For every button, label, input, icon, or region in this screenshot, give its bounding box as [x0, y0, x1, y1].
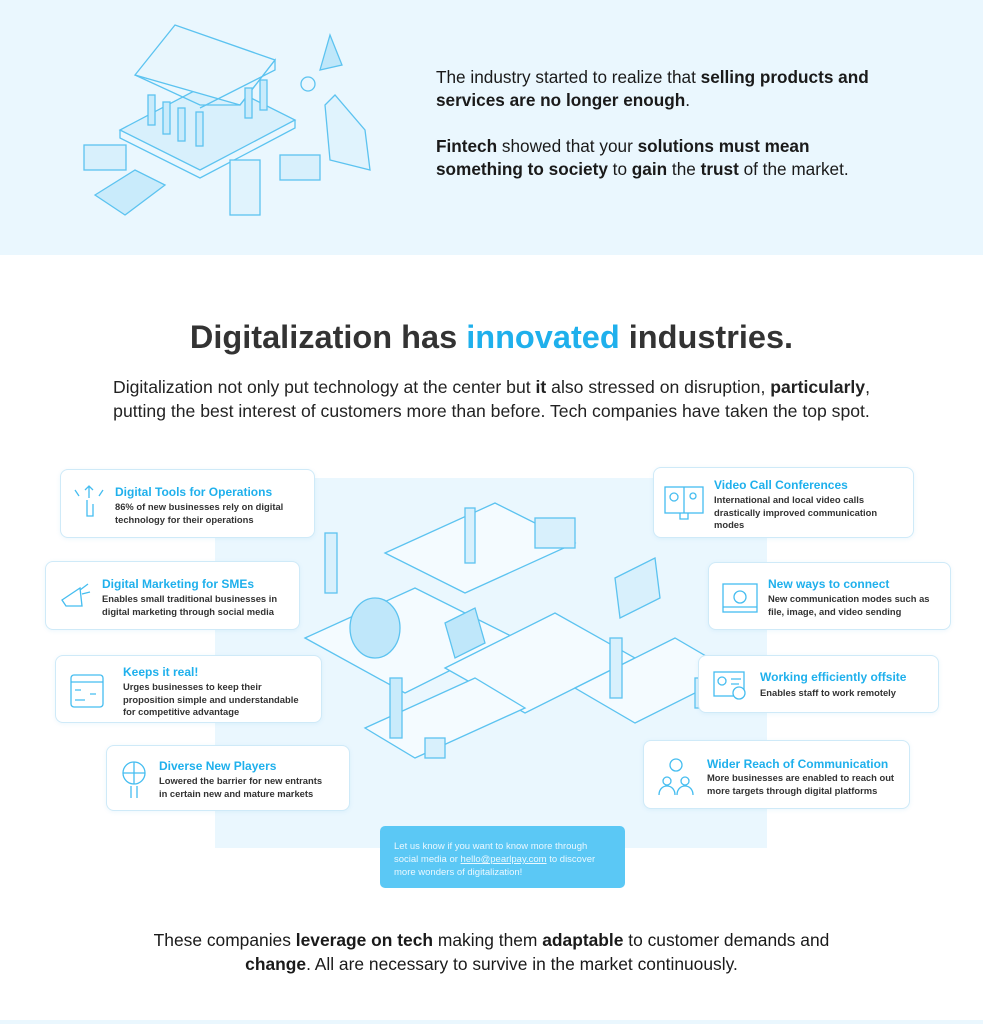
card: Video Call Conferences: drastically improved communication [714, 506, 877, 518]
card: New ways to connect: New communication modes such as [768, 593, 930, 604]
top text: services are no longer enough. [436, 90, 690, 110]
card: New ways to connect [708, 562, 951, 630]
card: Diverse New Players: Lowered the barrier for new entrants [159, 775, 322, 786]
card: Working efficiently offsite [698, 655, 939, 713]
card: Video Call Conferences [653, 467, 914, 538]
top text: The industry started to realize that selling products and [436, 67, 869, 87]
icon: megaphone [61, 584, 90, 607]
closing text: change. All are necessary to survive in the market continuously. [245, 954, 738, 974]
card: Wider Reach of Communication: Wider Reach of Communication [707, 757, 888, 771]
closing text [154, 930, 829, 974]
card: Keeps it real [55, 655, 322, 723]
intro paragraph: putting the best interest of customers more than before. Tech companies have taken the top spot. [113, 401, 870, 421]
intro paragraph: Digitalization not only put technology at the center but it also stressed on disruption, particularly, [113, 377, 870, 397]
icon: people communicating [658, 758, 694, 795]
card: Working efficiently offsite: Enables staff to work remotely [760, 687, 896, 698]
top banner [0, 0, 983, 255]
card: Keeps it real: for competitive advantage [123, 706, 239, 717]
icon: hand arrows [74, 485, 104, 517]
card: New ways to connect: file, image, and video sending [768, 606, 901, 616]
icon: video player [722, 583, 758, 613]
card: New ways to connect: New ways to connect [768, 577, 889, 591]
top text: something to society to gain the trust of the market. [436, 159, 849, 179]
card: Video Call Conferences: Video Call Conferences [714, 478, 848, 492]
card: Digital Tools for Operations [60, 469, 315, 538]
card: Diverse New Players: in certain new and mature markets [159, 788, 313, 798]
card: Diverse New Players [106, 745, 350, 811]
title: Digitalization has innovated industries. [190, 319, 793, 355]
icon: globe [122, 761, 146, 798]
card: Digital Tools for Operations: 86% of new businesses rely on digital [115, 501, 283, 512]
illustration panel [215, 478, 767, 848]
callout [380, 826, 625, 888]
icon: video call monitor [664, 486, 704, 520]
card: Video Call Conferences: International and local video calls [714, 494, 864, 505]
illustration: bank building [83, 24, 371, 216]
card: Keeps it real: Keeps it real! [123, 665, 198, 679]
card: Video Call Conferences: modes [714, 519, 744, 530]
card: Keeps it real: Urges businesses to keep their [123, 681, 262, 692]
card: Digital Marketing for SMEs: Enables small traditional businesses in [102, 593, 277, 604]
card: Digital Tools for Operations: Digital Tools for Operations [115, 485, 272, 499]
card: Working efficiently offsite: Working efficiently offsite [760, 670, 906, 684]
card: Wider Reach of Communication [643, 740, 910, 809]
card: Digital Marketing for SMEs: digital marketing through social media [102, 606, 274, 616]
closing text: These companies leverage on tech making them adaptable to customer demands and [154, 930, 829, 950]
top text [436, 67, 869, 179]
card: Digital Marketing for SMEs [45, 561, 300, 630]
card: Diverse New Players: Diverse New Players [159, 759, 276, 773]
card: Keeps it real: proposition simple and understandable [123, 694, 299, 704]
icon: browser [70, 674, 104, 708]
callout: Let us know if you want to know more through social media or hello@pearlpay.com to discover more wonders of digitalization! [394, 841, 595, 878]
card: Wider Reach of Communication: more targets through digital platforms [707, 784, 877, 796]
card: Digital Tools for Operations: technology for their operations [115, 514, 254, 524]
top text: Fintech showed that your solutions must mean [436, 136, 809, 156]
icon: id card check [713, 671, 746, 700]
card: Digital Marketing for SMEs: Digital Marketing for SMEs [102, 577, 254, 591]
card: Wider Reach of Communication: More businesses are enabled to reach out [707, 772, 894, 783]
intro paragraph [113, 377, 870, 421]
